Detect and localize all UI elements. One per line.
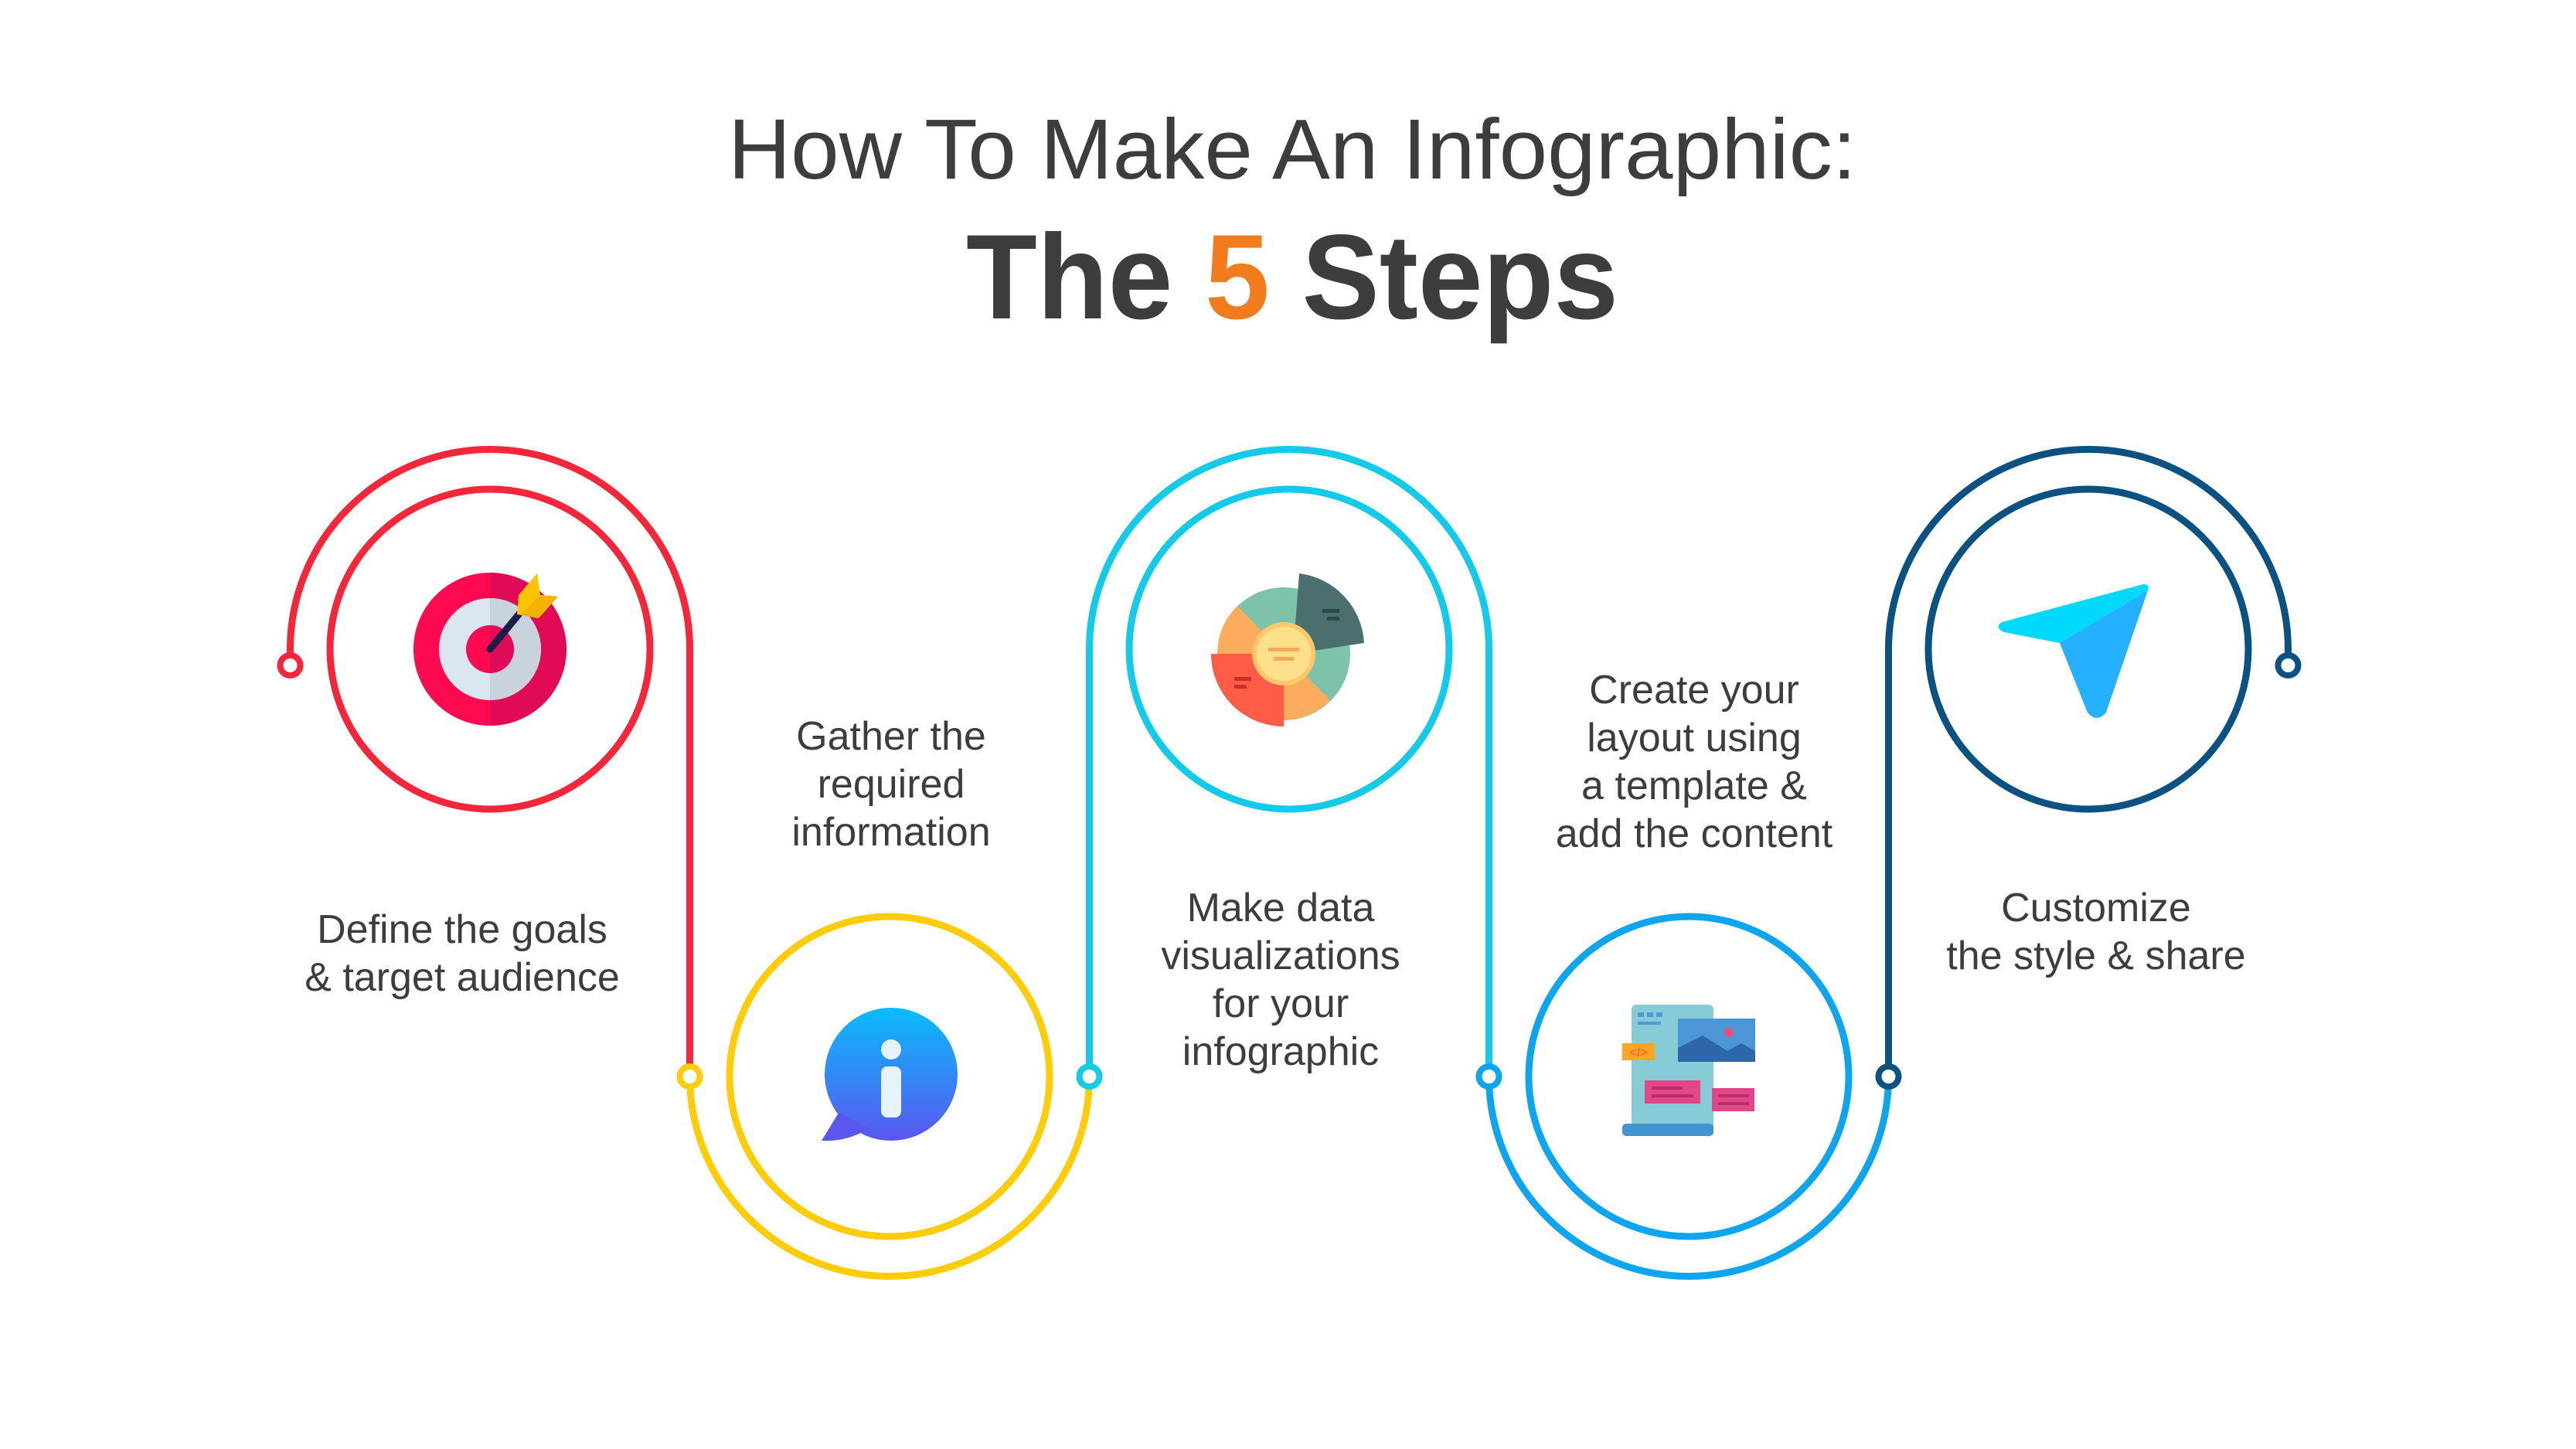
path: red segment xyxy=(291,450,689,1077)
text: step 5 xyxy=(1946,886,2246,978)
connector dots xyxy=(280,655,2299,1087)
text: step 2: Gather the xyxy=(796,714,986,759)
text: step 3: for your xyxy=(1213,981,1349,1026)
text: step 1: Define the goals xyxy=(317,907,607,952)
text: step 4: a template & xyxy=(1581,764,1807,808)
path: cyan segment xyxy=(1090,450,1489,1077)
text: step 5: the style & share xyxy=(1946,934,2246,978)
step 4 circle xyxy=(1529,917,1849,1236)
text: step 3: visualizations xyxy=(1161,934,1400,978)
title xyxy=(728,102,1856,345)
text: step 4: add the content xyxy=(1556,811,1833,856)
text: step 4: Create your xyxy=(1589,668,1799,713)
text: step 2: required xyxy=(818,762,965,807)
text: step 5: Customize xyxy=(2001,886,2191,930)
text: step 3: Make data xyxy=(1187,886,1374,930)
text: step 4 xyxy=(1556,668,1833,856)
step 1 circle xyxy=(330,489,650,809)
path: blue segment xyxy=(1489,1077,1889,1277)
title: The 5 Steps xyxy=(966,210,1618,345)
path: yellow segment xyxy=(689,1077,1090,1277)
text: step 1: & target audience xyxy=(305,955,620,1000)
step 5 circle xyxy=(1928,489,2248,809)
text: step 4: layout using xyxy=(1587,716,1802,760)
step 2 circle xyxy=(730,917,1050,1236)
text: step 2 xyxy=(791,714,991,855)
icon: paper plane xyxy=(1999,584,2149,718)
text: step 1 xyxy=(305,907,620,1000)
icon: layout template xyxy=(1622,1005,1755,1136)
step 3 circle xyxy=(1129,489,1449,809)
text: step 2: information xyxy=(791,810,991,855)
icon: layout template: </> xyxy=(1629,1046,1648,1060)
icon: pie chart xyxy=(1211,573,1364,726)
icon: target with dart xyxy=(413,573,567,726)
path: dark blue segment xyxy=(1889,450,2288,1077)
title: How To Make An Infographic: xyxy=(728,102,1856,197)
text: step 3: infographic xyxy=(1183,1029,1379,1074)
icon: info bubble xyxy=(822,1008,958,1141)
text: step 3 xyxy=(1161,886,1400,1074)
